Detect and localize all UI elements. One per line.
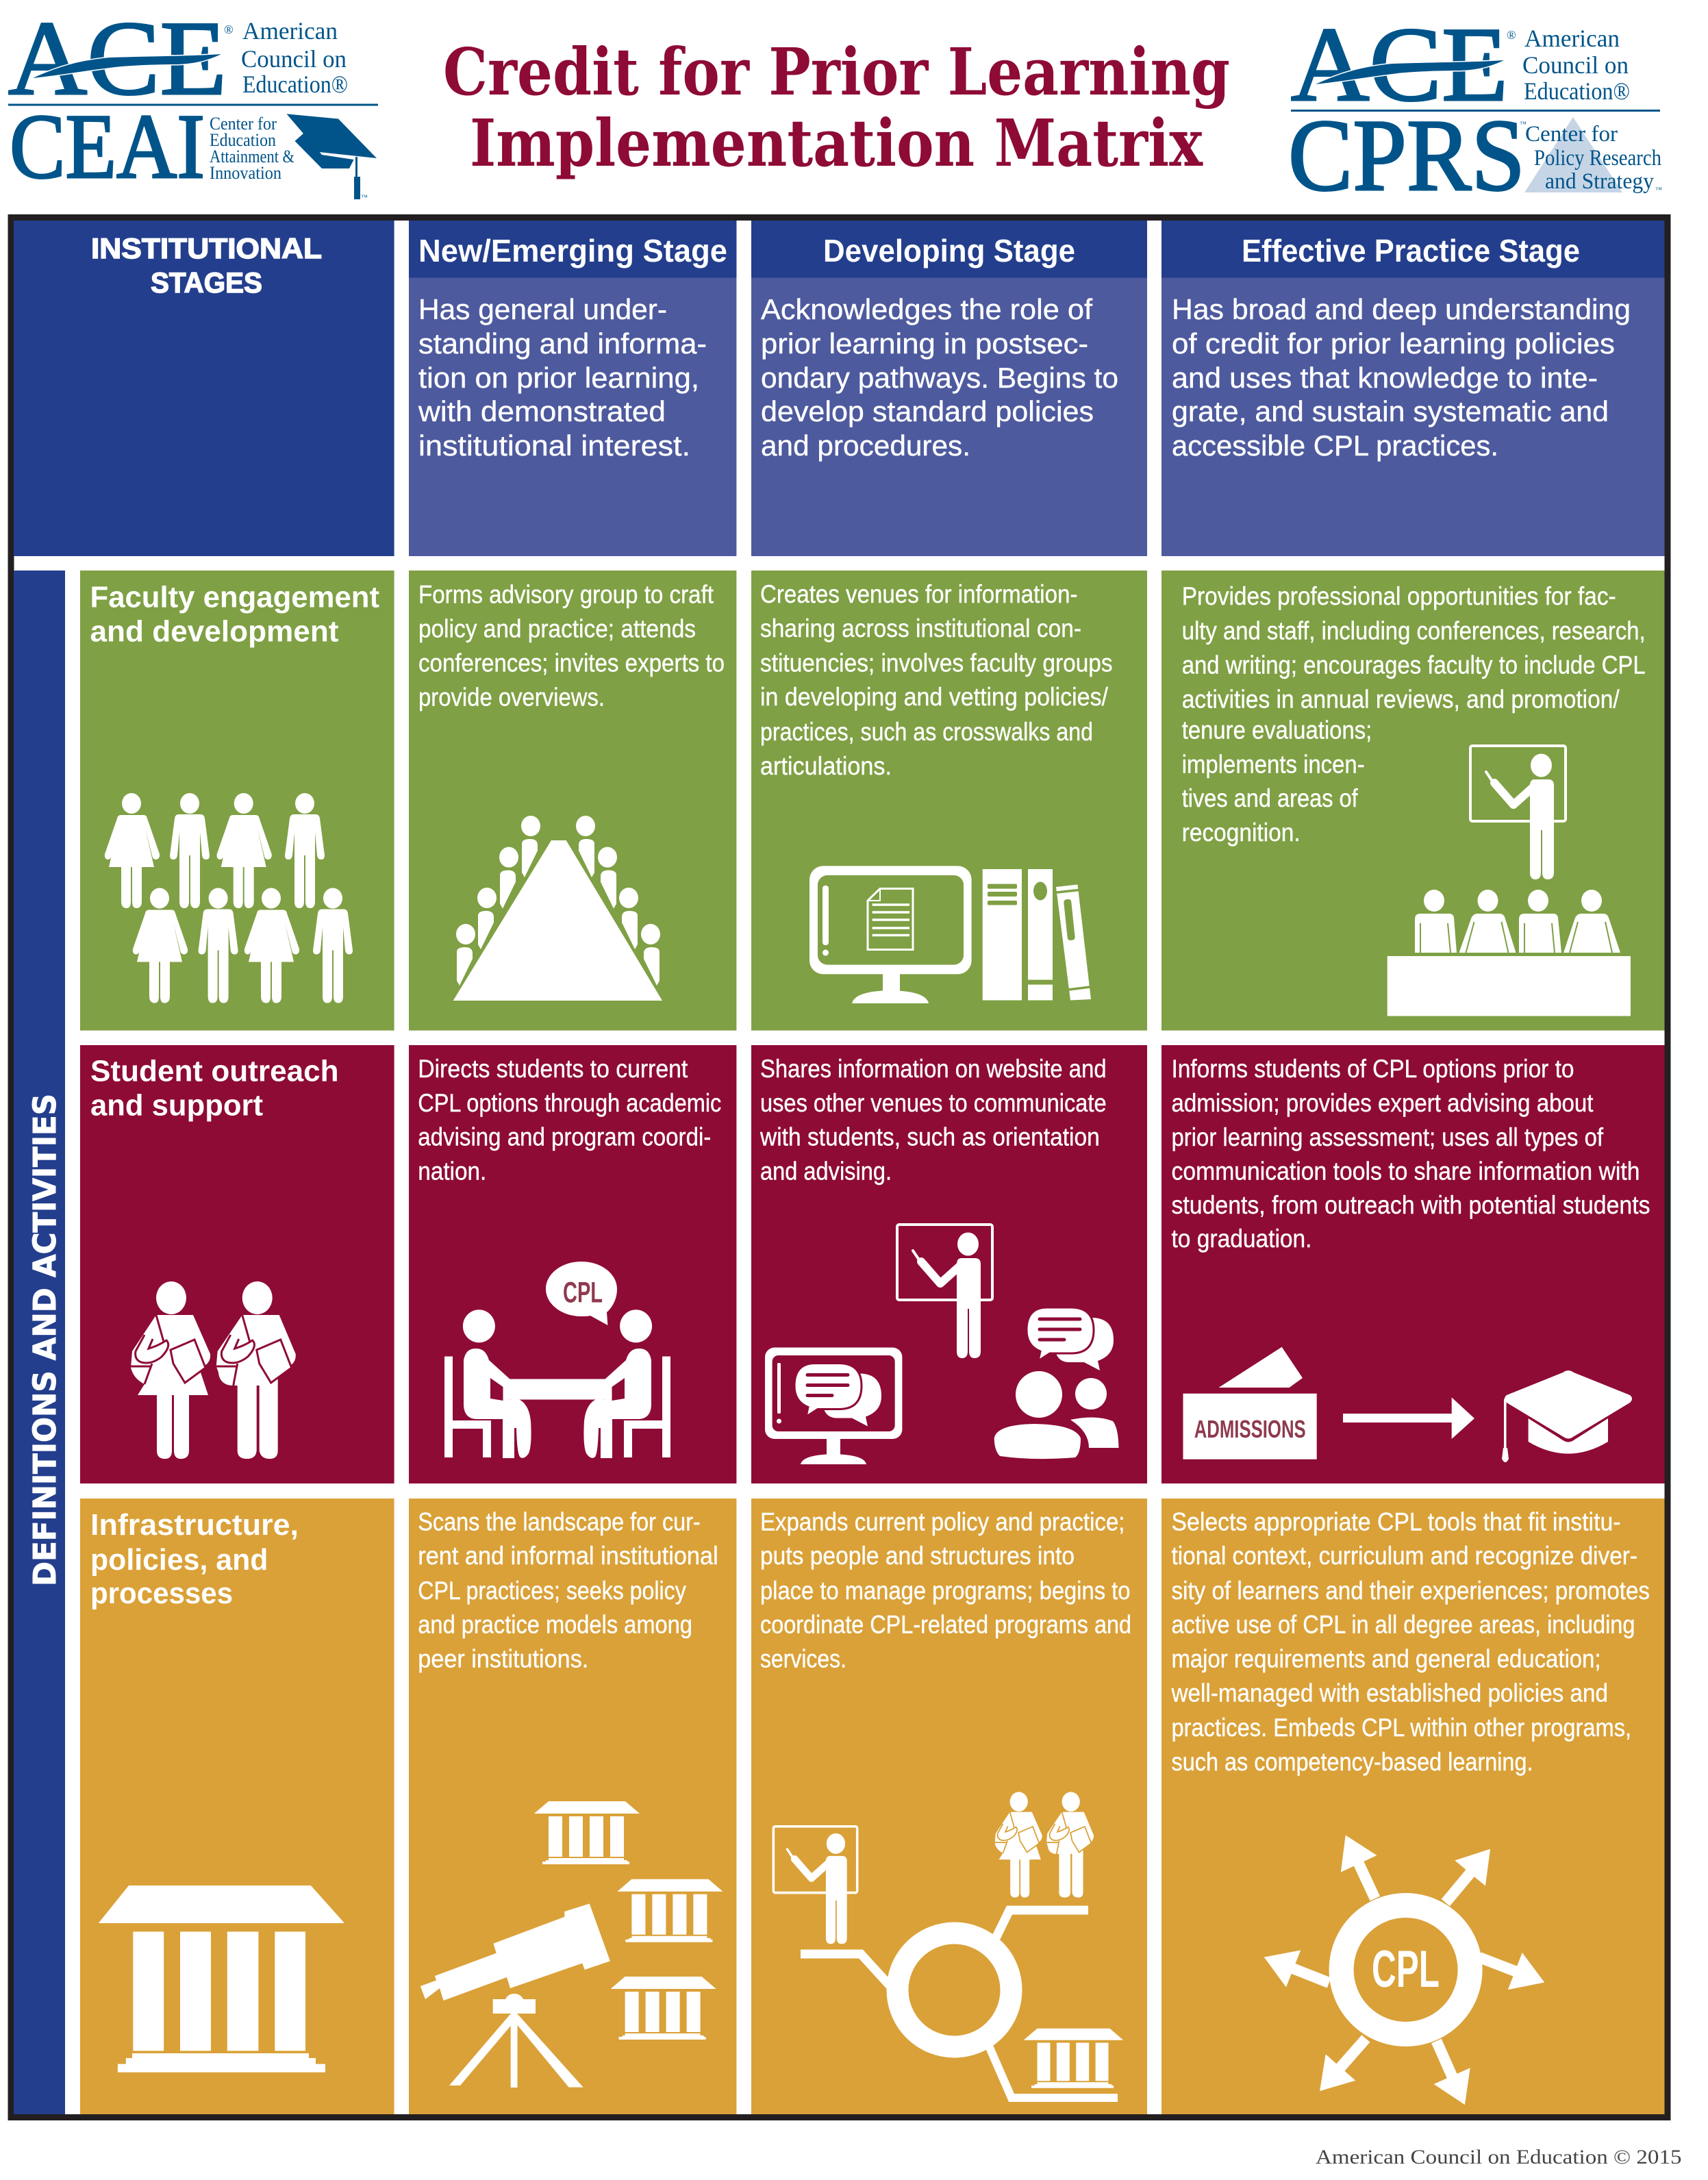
American Council on Education: Education® (242, 71, 348, 98)
text: creates venues: practices, such as crosswalks and (760, 718, 1093, 746)
CPRS wordmark: ™ (1520, 121, 1527, 128)
text: developing description: and procedures. (761, 429, 970, 462)
icon: CPL hub with arrows: CPL (1372, 1940, 1440, 1999)
text: forms advisory group: conferences; invites experts to (418, 649, 725, 677)
panel: infrastructure label (80, 1499, 394, 2114)
Center for Policy Research and Strategy (1525, 122, 1662, 194)
text: expands current policy (760, 1507, 1131, 1673)
arrow (1343, 1397, 1474, 1439)
text: effective practice description: and uses that knowledge to inte- (1172, 362, 1598, 394)
panel: infrastructure developing (751, 1499, 1147, 2114)
panel: student effective practice (1161, 1045, 1664, 1483)
Center for Education Attainment and Innovation (210, 114, 294, 183)
text: expands current policy: place to manage programs; begins to (760, 1577, 1130, 1605)
text: expands current policy: services. (760, 1645, 846, 1673)
icon: students (995, 1792, 1094, 1898)
title (443, 34, 1230, 181)
icon: computer and books (809, 866, 1091, 1003)
text: provides professional opportunities: recognition. (1182, 818, 1301, 847)
heading: definitions and activities: DEFINITIONS AND ACTIVITIES (27, 1094, 63, 1586)
panel: definitions and activities sidebar (14, 571, 65, 2114)
text: scans the landscape (418, 1507, 718, 1673)
text: developing description: ondary pathways. Begins to (761, 362, 1118, 394)
heading: faculty engagement and development (90, 581, 379, 649)
heading: infrastructure, policies, and processes (90, 1508, 299, 1610)
Center for Education Attainment and Innovation: Innovation (210, 163, 281, 183)
text: provides professional opportunities: activities in annual reviews, and promotion/ (1182, 685, 1620, 714)
text: developing description: prior learning in postsec- (761, 327, 1088, 360)
text: selects appropriate tools: sity of learners and their experiences; promotes (1171, 1577, 1650, 1605)
Center for Education Attainment and Innovation: Center for (210, 114, 277, 134)
heading: infrastructure, policies, and processes: Infrastructure, (90, 1508, 299, 1542)
ACE wordmark: ® (224, 23, 234, 36)
text: shares information: uses other venues to communicate (760, 1089, 1107, 1117)
icon: connected hub (801, 1910, 1118, 2098)
text: shares information: Shares information on website and (760, 1055, 1107, 1083)
icon: group of faculty (105, 793, 353, 1003)
icon: peer institutions (534, 1801, 723, 2040)
text: expands current policy: Expands current policy and practice; (760, 1507, 1125, 1536)
text: selects appropriate tools: well-managed with established policies and (1171, 1679, 1608, 1707)
icon: teacher at board (1470, 746, 1566, 879)
text: creates venues: in developing and vetting policies/ (760, 683, 1109, 711)
heading: effective practice stage: Effective Practice Stage (1242, 233, 1580, 268)
text: developing description: Acknowledges the role of (761, 293, 1092, 325)
text: directs students: nation. (418, 1157, 486, 1185)
text: new/emerging description: with demonstrated (418, 395, 666, 427)
text: forms advisory group: Forms advisory group to craft (418, 581, 714, 609)
text: selects appropriate tools: active use of CPL in all degree areas, including (1171, 1611, 1635, 1639)
heading: developing stage: Developing Stage (823, 233, 1075, 268)
icon: graduation cap (286, 114, 377, 201)
heading: institutional stages: STAGES (151, 266, 262, 299)
panel: student developing (751, 1045, 1147, 1483)
panel: faculty engagement label (80, 571, 394, 1031)
text: effective practice description: of credit for prior learning policies (1172, 327, 1615, 360)
text: developing description (761, 293, 1118, 462)
text: informs students: to graduation. (1171, 1225, 1312, 1253)
text: provides professional opportunities: implements incen- (1182, 751, 1365, 778)
text: creates venues: Creates venues for information- (760, 580, 1078, 608)
American Council on Education: Council on (241, 45, 347, 73)
text: informs students: students, from outreach with potential students (1171, 1191, 1650, 1219)
icon: audience at table (1387, 890, 1631, 1016)
icon: graduation cap: ™ (361, 194, 368, 201)
text: scans the landscape: Scans the landscape for cur- (418, 1507, 701, 1536)
icon: institution building (99, 1885, 344, 2072)
American Council on Education (241, 17, 348, 98)
text: informs students: communication tools to share information with (1171, 1157, 1640, 1185)
American Council on Education: Education® (1524, 77, 1630, 105)
text: scans the landscape: rent and informal institutional (418, 1542, 718, 1570)
text: effective practice description (1172, 293, 1631, 462)
text: expands current policy: coordinate CPL-related programs and (760, 1611, 1131, 1639)
CPRS triangle (1524, 117, 1622, 192)
panel: infrastructure effective practice (1161, 1499, 1664, 2114)
heading: institutional stages: INSTITUTIONAL (91, 232, 322, 264)
icon: people talking (994, 1307, 1119, 1459)
heading: student outreach and support (90, 1055, 339, 1122)
footer credit: American Council on Education © 2015 (1316, 2146, 1682, 2168)
Center for Education Attainment and Innovation: Education (210, 130, 276, 150)
text: creates venues: articulations. (760, 752, 892, 780)
icon: admissions box: ADMISSIONS (1194, 1415, 1306, 1443)
text: effective practice description: grate, and sustain systematic and (1172, 395, 1609, 427)
icon: graduation cap (1502, 1370, 1632, 1462)
text: creates venues: sharing across institutional con- (760, 614, 1081, 642)
heading: infrastructure, policies, and processes: policies, and (90, 1543, 268, 1577)
text: shares information: and advising. (760, 1157, 892, 1185)
panel: effective practice stage (1161, 221, 1664, 556)
text: selects appropriate tools: tional context, curriculum and recognize diver- (1171, 1542, 1637, 1570)
icon: teacher (773, 1827, 857, 1944)
logo: ACE CPRS (1288, 5, 1662, 212)
text: directs students: advising and program coordi- (418, 1123, 711, 1151)
text: new/emerging description (418, 293, 707, 462)
panel: developing stage (751, 221, 1147, 556)
heading: institutional stages (91, 232, 322, 299)
text: creates venues (760, 580, 1113, 780)
panel: faculty effective practice (1161, 571, 1664, 1031)
text: directs students: Directs students to current (418, 1055, 688, 1083)
text: scans the landscape: peer institutions. (418, 1645, 588, 1673)
ACE wordmark: ACE (1291, 5, 1508, 123)
Center for Policy Research and Strategy: and Strategy (1545, 169, 1654, 194)
American Council on Education: American (242, 17, 338, 45)
text: selects appropriate tools: such as competency-based learning. (1171, 1748, 1533, 1776)
panel: new/emerging stage (409, 221, 736, 556)
text: provides professional opportunities: Provides professional opportunities for fac- (1182, 582, 1616, 610)
text: selects appropriate tools: Selects appropriate CPL tools that fit institu- (1171, 1507, 1620, 1536)
logo: ACE CEAI (8, 0, 378, 201)
icon: advising meeting with CPL speech bubble (444, 1262, 670, 1458)
text: expands current policy: puts people and structures into (760, 1542, 1075, 1570)
text: provides professional opportunities: and writing; encourages faculty to include CPL (1182, 651, 1646, 679)
Center for Policy Research and Strategy: Center for (1525, 122, 1618, 147)
text: new/emerging description: tion on prior learning, (418, 362, 699, 394)
heading: new/emerging stage: New/Emerging Stage (418, 233, 727, 268)
American Council on Education: Council on (1522, 51, 1629, 79)
text: shares information: with students, such as orientation (759, 1123, 1100, 1151)
text: provides professional opportunities: ulty and staff, including conferences, research, (1182, 616, 1646, 644)
icon: monitor with speech bubbles (765, 1348, 902, 1464)
text: forms advisory group (418, 581, 725, 711)
text: new/emerging description: institutional interest. (418, 429, 690, 462)
text: selects appropriate tools: practices. Embeds CPL within other programs, (1171, 1714, 1631, 1742)
CEAI wordmark: CEAI (10, 96, 205, 198)
icon: CPL hub with arrows (1257, 1827, 1552, 2113)
heading: student outreach and support: and support (90, 1088, 263, 1122)
icon: admissions box (1183, 1347, 1317, 1459)
text: informs students: admission; provides expert advising about (1171, 1089, 1594, 1117)
panel: student new/emerging (409, 1045, 736, 1483)
text: forms advisory group: provide overviews. (418, 683, 605, 711)
icon: conference table (453, 816, 662, 1001)
panel: institutional stages (14, 221, 394, 556)
icon: teacher at board (897, 1225, 992, 1358)
text: provides professional opportunities: tives and areas of (1182, 784, 1358, 812)
text: informs students: prior learning assessment; uses all types of (1171, 1123, 1604, 1151)
panel: infrastructure new/emerging (409, 1499, 736, 2114)
text: informs students: Informs students of CPL options prior to (1171, 1055, 1574, 1083)
heading: infrastructure, policies, and processes: processes (90, 1577, 233, 1610)
Center for Education Attainment and Innovation: Attainment & (210, 147, 294, 166)
icon: institution (1024, 2029, 1123, 2088)
text: provides professional opportunities (1182, 582, 1646, 847)
text: directs students (418, 1055, 721, 1185)
Center for Policy Research and Strategy: Policy Research (1534, 146, 1661, 171)
text: effective practice description: Has broad and deep understanding (1172, 293, 1631, 325)
text: informs students (1171, 1055, 1650, 1253)
text: provides professional opportunities: tenure evaluations; (1182, 716, 1372, 744)
title: Credit for Prior Learning (443, 34, 1230, 110)
text: creates venues: stituencies; involves faculty groups (760, 649, 1113, 677)
text: effective practice description: accessible CPL practices. (1172, 429, 1498, 462)
text: new/emerging description: Has general under- (418, 293, 667, 325)
text: forms advisory group: policy and practice; attends (418, 615, 696, 643)
heading: faculty engagement and development: and development (90, 615, 339, 649)
text: directs students: CPL options through academic (418, 1089, 721, 1117)
ACE wordmark: ® (1507, 28, 1516, 42)
text: selects appropriate tools (1171, 1507, 1650, 1776)
text: shares information (759, 1055, 1107, 1185)
text: scans the landscape: CPL practices; seeks policy (418, 1577, 686, 1605)
text: new/emerging description: standing and informa- (418, 327, 707, 360)
panel: student outreach label (80, 1045, 394, 1483)
ACE wordmark: ACE (8, 0, 227, 117)
Center for Policy Research and Strategy: ™ (1655, 186, 1662, 194)
heading: faculty engagement and development: Faculty engagement (90, 581, 379, 614)
icon: advising meeting with CPL speech bubble: CPL (563, 1277, 603, 1310)
American Council on Education: American (1524, 25, 1620, 52)
text: selects appropriate tools: major requirements and general education; (1171, 1645, 1601, 1673)
panel: faculty developing (751, 571, 1147, 1031)
title: Implementation Matrix (470, 105, 1203, 181)
text: scans the landscape: and practice models among (418, 1611, 692, 1639)
American Council on Education (1522, 25, 1630, 105)
panel: faculty new/emerging (409, 571, 736, 1031)
icon: telescope (420, 1904, 610, 2088)
CPRS wordmark: CPRS (1288, 99, 1525, 212)
text: developing description: develop standard policies (761, 395, 1094, 427)
heading: student outreach and support: Student outreach (90, 1055, 339, 1088)
icon: two students (131, 1281, 296, 1459)
